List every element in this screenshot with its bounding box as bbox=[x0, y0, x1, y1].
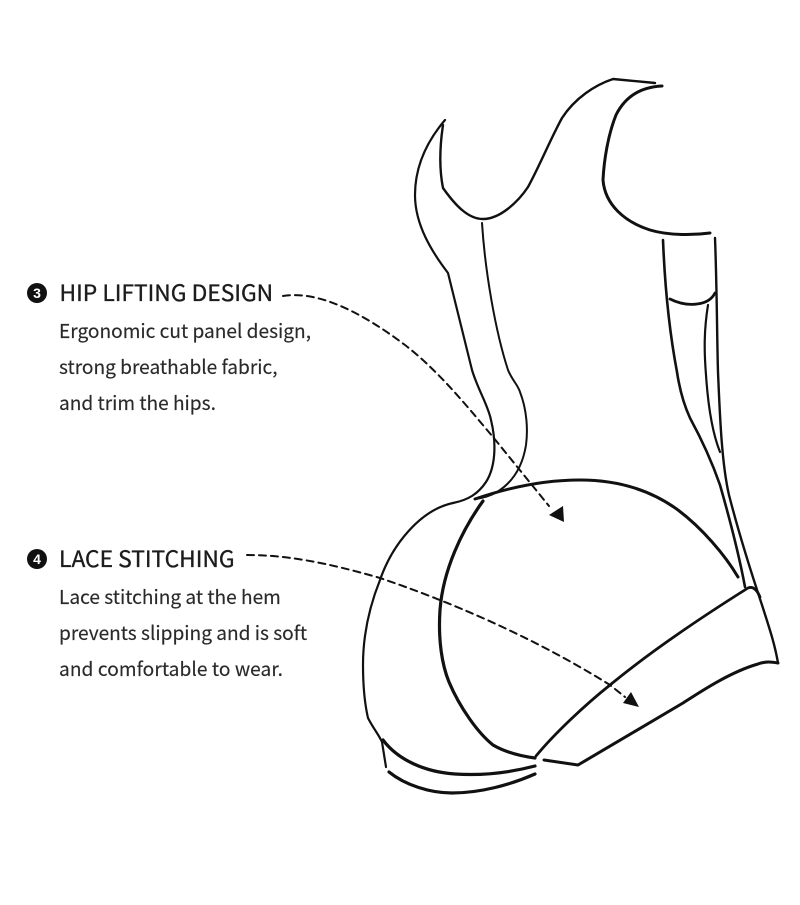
callout: hip lifting design: strong breathable fabric, bbox=[59, 352, 278, 380]
hip curve bbox=[475, 480, 738, 577]
side band bbox=[670, 293, 715, 304]
inner side line bbox=[705, 305, 720, 452]
right side outline bbox=[715, 238, 778, 663]
callout: lace stitching: prevents slipping and is soft bbox=[59, 618, 307, 646]
hem line upper bbox=[383, 740, 535, 775]
number badge 4 bbox=[27, 549, 47, 569]
number badge 4: 4 bbox=[33, 551, 41, 567]
heading: LACE STITCHING bbox=[59, 541, 235, 574]
heading: HIP LIFTING DESIGN bbox=[60, 275, 273, 308]
left strap and left body outline bbox=[415, 120, 494, 503]
back panel line bbox=[663, 240, 745, 587]
callout: lace stitching bbox=[27, 541, 307, 682]
callout: hip lifting design bbox=[27, 275, 311, 416]
number badge 3: 3 bbox=[33, 285, 41, 301]
number badge 3 bbox=[27, 283, 47, 303]
dashed arrow: lace stitching bbox=[247, 555, 639, 707]
waist band bbox=[536, 587, 760, 756]
outer hip outline bbox=[363, 503, 453, 767]
neckline and shoulder bbox=[440, 79, 655, 219]
right armhole bbox=[603, 86, 710, 235]
callout: lace stitching: and comfortable to wear. bbox=[59, 654, 283, 682]
waist band lower edge bbox=[544, 662, 778, 765]
hem line lower bbox=[389, 772, 535, 793]
description: Ergonomic cut panel design, bbox=[59, 316, 311, 344]
callout: hip lifting design: and trim the hips. bbox=[59, 388, 216, 416]
description: Lace stitching at the hem bbox=[59, 582, 281, 610]
front panel seam bbox=[475, 223, 527, 499]
dashed arrow: hip lifting bbox=[283, 295, 564, 522]
inner hip seam bbox=[439, 501, 535, 758]
